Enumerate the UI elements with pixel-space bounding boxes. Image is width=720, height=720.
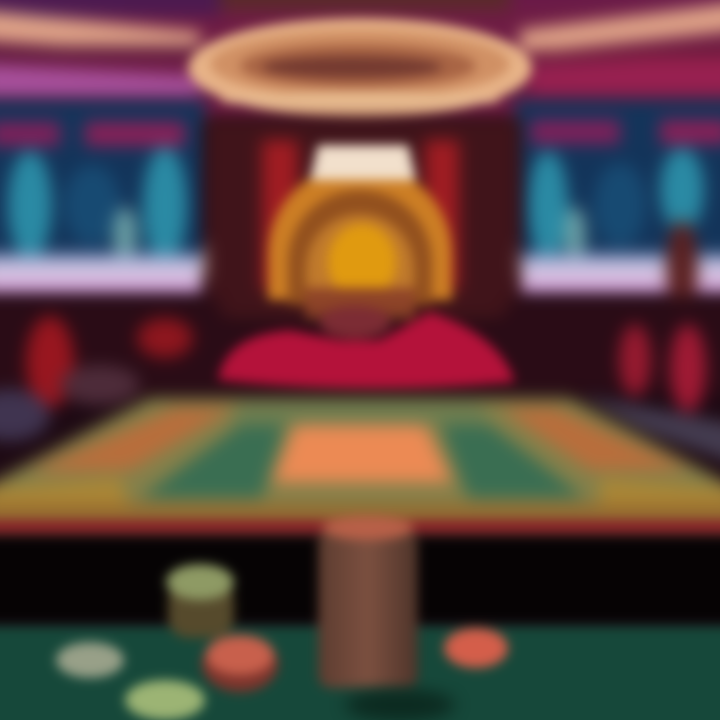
table segment: right green [440, 425, 585, 498]
chip stack [318, 516, 418, 688]
chandelier ring [188, 18, 532, 118]
black band [0, 538, 720, 622]
gaming table [0, 398, 720, 530]
right screens [477, 100, 720, 316]
chip: grey [56, 642, 124, 678]
table segment: left green [140, 425, 285, 498]
table segment: right orange [500, 408, 690, 470]
ceiling band: left [0, 10, 200, 56]
chip: coral right [444, 628, 508, 668]
central alcove and curtains [205, 118, 520, 328]
chip: light green [125, 680, 205, 720]
shadow under stack [345, 689, 455, 720]
chip: olive stack [166, 564, 234, 638]
green felt [0, 626, 720, 720]
golden arch [268, 145, 452, 322]
chip: coral left [202, 635, 278, 692]
crimson strip: right [530, 52, 720, 96]
purple strip: left [0, 64, 200, 98]
white light panel [310, 145, 416, 180]
ceiling [0, 0, 720, 120]
red cushions [218, 306, 515, 389]
dark band behind seating [0, 298, 720, 395]
left screens [0, 100, 245, 296]
table segment: left orange [30, 408, 235, 472]
left seats [0, 316, 193, 441]
right seats [580, 324, 720, 465]
ceiling band: right [520, 2, 720, 54]
table rail [0, 520, 720, 533]
table centre orange panel [272, 425, 452, 482]
